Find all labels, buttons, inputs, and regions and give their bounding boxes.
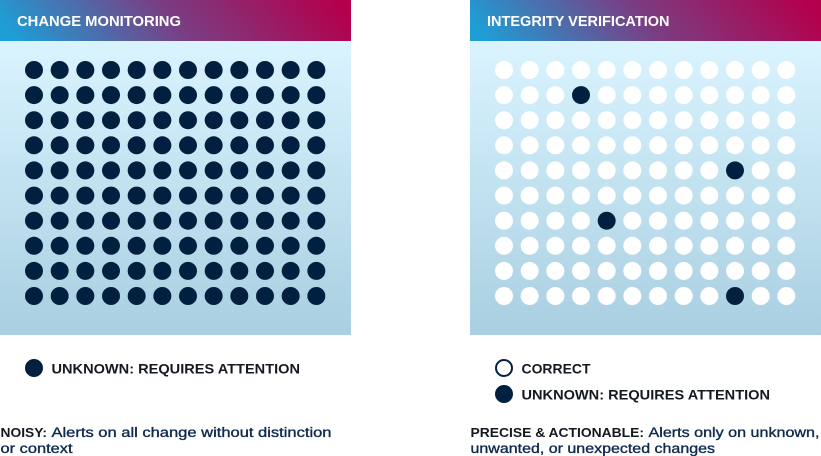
header bar [470,0,821,41]
text block: noisy: or context [0,441,73,456]
panel background [470,41,821,335]
icon: unknown dot [495,385,513,403]
dots: unknown items [572,86,744,305]
text block: noisy: NOISY: [0,425,47,440]
text block: precise and actionable: unwanted, or unexpected changes [470,441,715,456]
panel: change monitoring [0,0,351,335]
heading: integrity verification: INTEGRITY VERIFICATION [487,14,670,30]
text block: precise and actionable: Alerts only on unknown, [648,425,820,440]
text block: precise and actionable: PRECISE & ACTIONABLE: [470,425,644,440]
icon: unknown dot [25,359,43,377]
dot grid: all unknown [25,61,325,305]
legend: integrity verification [495,360,770,403]
header bar [0,0,351,41]
legend label: correct: CORRECT [522,360,591,376]
text block: noisy [0,425,332,456]
heading: change monitoring: CHANGE MONITORING [17,14,181,30]
legend label: unknown: UNKNOWN: REQUIRES ATTENTION [522,386,770,402]
icon: correct ring [496,360,512,376]
legend label: unknown: UNKNOWN: REQUIRES ATTENTION [52,360,300,376]
dot grid: correct items [495,61,795,305]
text block: precise and actionable [470,425,820,456]
panel background [0,41,351,335]
panel: integrity verification [470,0,821,335]
text block: noisy: Alerts on all change without distinction [52,425,332,440]
legend: change monitoring [25,359,300,377]
